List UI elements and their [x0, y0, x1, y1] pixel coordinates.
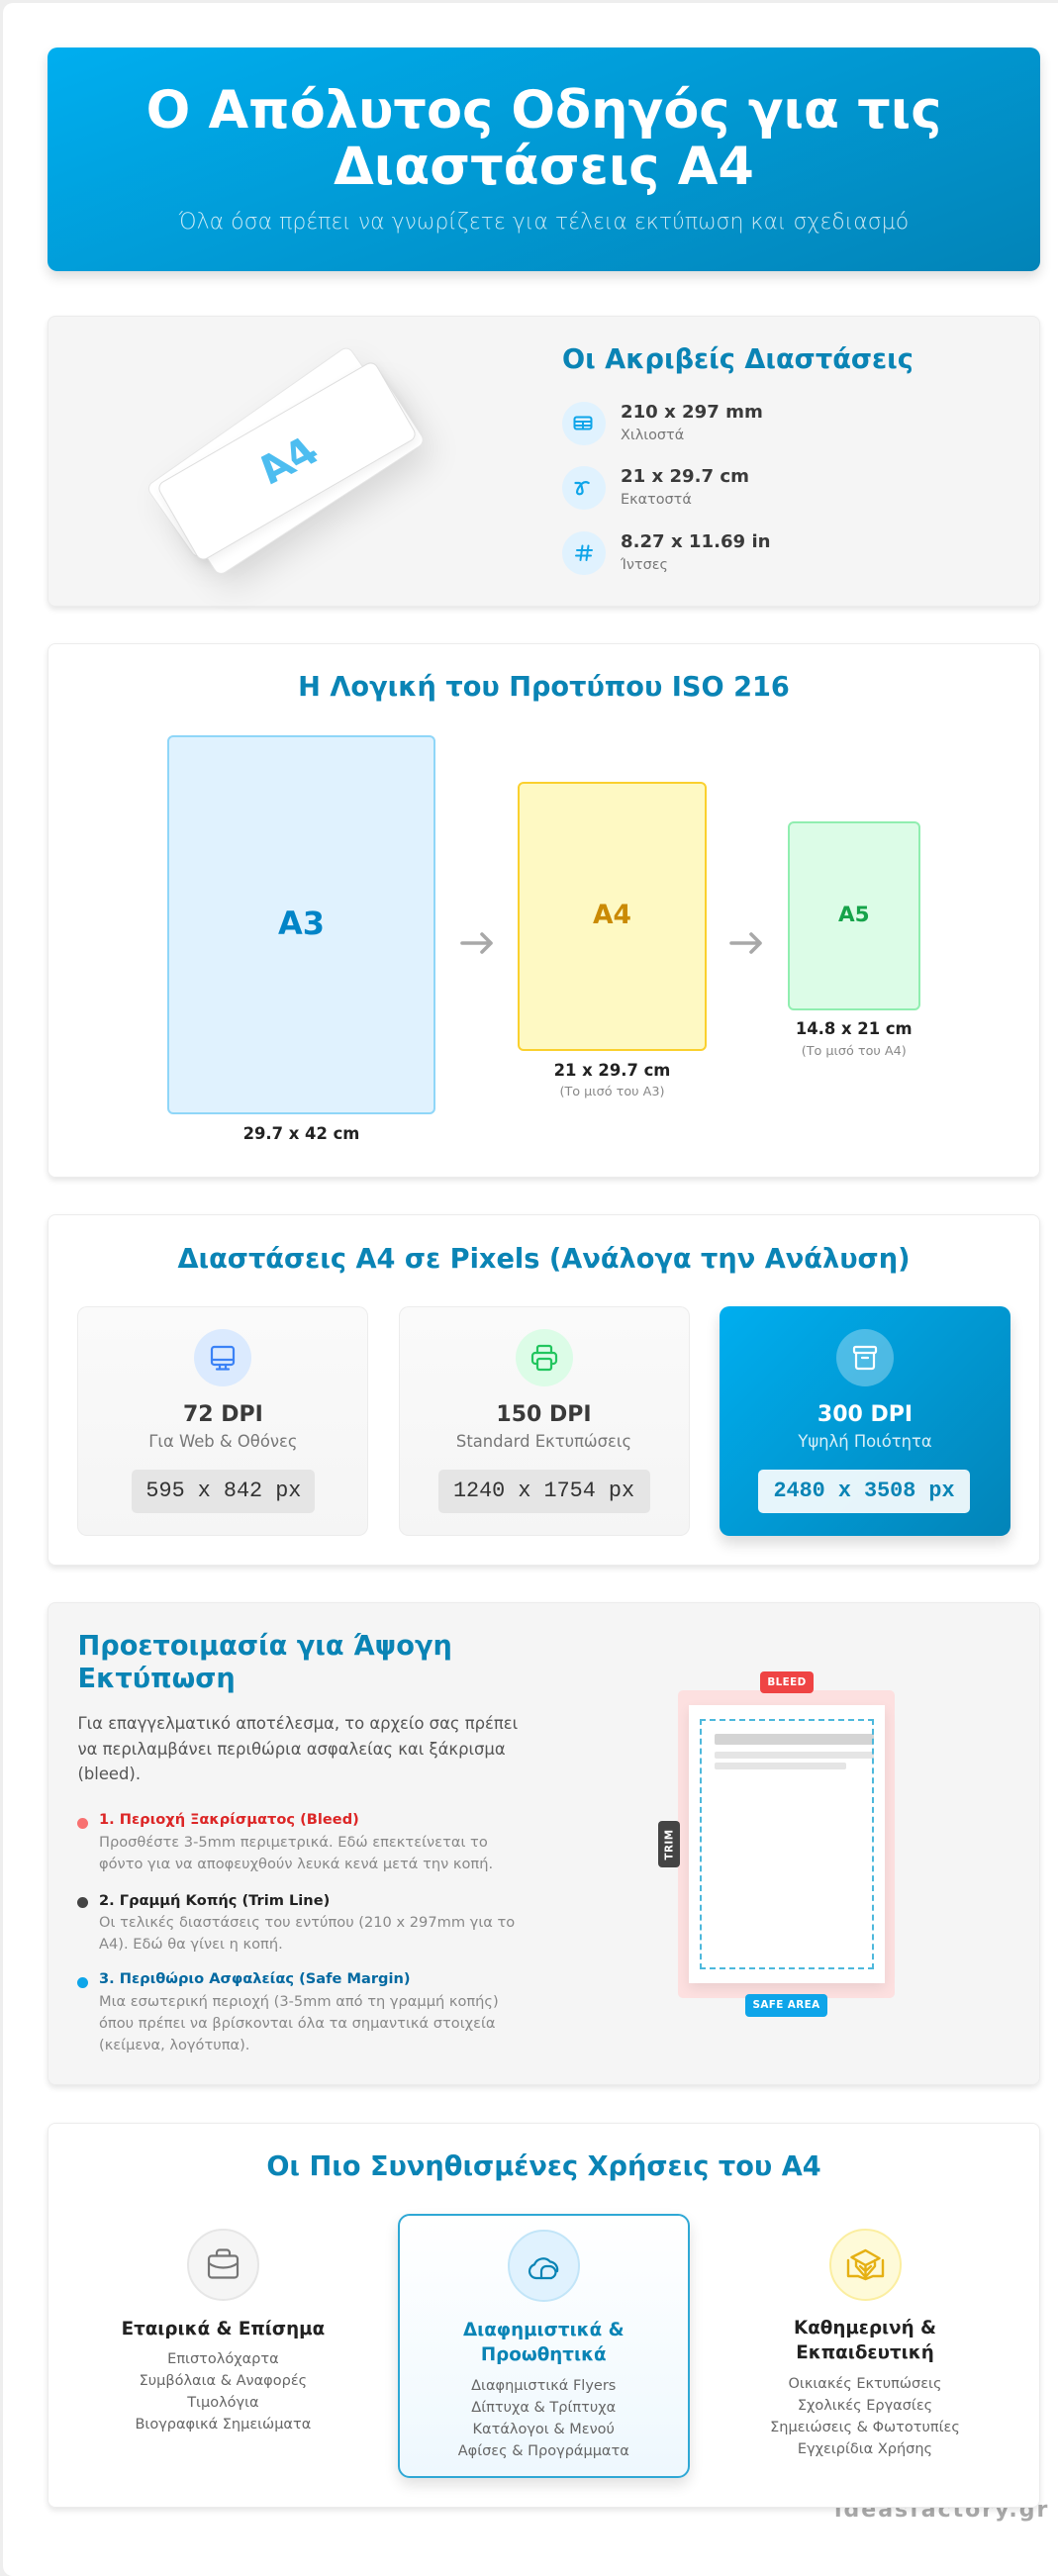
label: A5 size: 14.8 x 21 cm	[796, 1019, 913, 1038]
item title: 2. Γραμμή Κοπής (Trim Line)	[99, 1892, 330, 1909]
usage: Για Web & Οθόνες	[148, 1432, 297, 1451]
resolution: 72 DPI	[183, 1402, 263, 1427]
item: safe margin	[77, 1970, 499, 2053]
value: 210 x 297 mm	[621, 402, 763, 423]
card: 72 DPI	[77, 1306, 368, 1536]
heading: Προετοιμασία για Άψογη	[77, 1631, 452, 1662]
column: everyday and education	[770, 2229, 960, 2457]
intro paragraph	[77, 1714, 518, 1783]
tag: safe area	[745, 1994, 827, 2017]
sheet: A5	[788, 821, 920, 1010]
subtitle: Όλα όσα πρέπει να γνωρίζετε για τέλεια εκτύπωση και σχεδιασμό	[179, 210, 909, 234]
resolution: 150 DPI	[496, 1402, 592, 1427]
watermark: ideasfactory.gr	[834, 2498, 1049, 2523]
item: bleed	[77, 1811, 493, 1872]
title	[146, 80, 941, 197]
pixel size: 595 x 842 px	[145, 1479, 301, 1503]
tag: bleed	[760, 1671, 814, 1693]
item text: Οι τελικές διαστάσεις του εντύπου (210 x 297mm για το	[99, 1914, 515, 1931]
arrow: A3 to A4	[460, 932, 493, 954]
item title: 1. Περιοχή Ξακρίσματος (Bleed)	[99, 1811, 359, 1828]
panel: ISO 216 logic	[48, 643, 1040, 1178]
heading	[77, 1631, 452, 1694]
heading: Εκτύπωση	[77, 1664, 236, 1694]
column list: Οικιακές Εκτυπώσεις	[788, 2376, 941, 2392]
title: Διαστάσεις A4	[334, 137, 754, 197]
item text: A4). Εδώ θα γίνει η κοπή.	[99, 1936, 283, 1953]
placeholder bars	[715, 1734, 874, 1745]
item title: 3. Περιθώριο Ασφαλείας (Safe Margin)	[99, 1970, 411, 1987]
icon: graduation cap and book	[829, 2229, 901, 2301]
column title: Διαφημιστικά &	[463, 2320, 625, 2339]
usage: Υψηλή Ποιότητα	[798, 1432, 932, 1451]
intro paragraph: Για επαγγελματικό αποτέλεσμα, το αρχείο σας πρέπει	[77, 1714, 518, 1733]
tag: safe area: SAFE AREA	[752, 1999, 820, 2011]
column list: Βιογραφικά Σημειώματα	[135, 2417, 311, 2433]
note: half of A4: (Το μισό του A4)	[802, 1044, 907, 1059]
item text: Προσθέστε 3-5mm περιμετρικά. Εδώ επεκτείνεται το	[99, 1834, 488, 1851]
column list	[770, 2376, 960, 2457]
caption: Χιλιοστά	[621, 428, 684, 443]
column title	[463, 2320, 625, 2365]
bleed area	[678, 1690, 895, 1998]
sheet: A3	[167, 735, 435, 1114]
item text: φόντο για να αποφευχθούν λευκά κενά μετά την κοπή.	[99, 1856, 493, 1872]
item: trim line	[77, 1892, 515, 1953]
icon: archive	[836, 1329, 894, 1386]
diagram: bleed, trim, safe area	[658, 1671, 895, 2017]
safe margin outline	[700, 1719, 874, 1969]
icon: printer	[515, 1329, 572, 1386]
column list: Σημειώσεις & Φωτοτυπίες	[770, 2420, 960, 2435]
heading: Διαστάσεις A4 σε Pixels (Ανάλογα την Ανάλυση)	[177, 1244, 911, 1275]
column list: Διαφημιστικά Flyers	[471, 2378, 616, 2394]
column list: Κατάλογοι & Μενού	[473, 2422, 615, 2437]
caption: Ίντσες	[621, 557, 668, 573]
column list: Εγχειρίδια Χρήσης	[798, 2441, 932, 2457]
tag: bleed: BLEED	[767, 1676, 807, 1688]
pixel size	[132, 1470, 315, 1513]
icon: cloud	[508, 2230, 580, 2302]
caption: Εκατοστά	[621, 492, 692, 508]
item text	[99, 1914, 515, 1953]
card: 150 DPI	[398, 1306, 689, 1536]
panel: exact dimensions	[48, 316, 1040, 607]
column: advertising (highlighted)	[398, 2214, 689, 2478]
dot	[77, 1897, 87, 1908]
icon: ruler glyph	[562, 466, 606, 510]
sheet: A4	[518, 782, 707, 1051]
resolution: 300 DPI	[818, 1402, 913, 1427]
column list: Δίπτυχα & Τρίπτυχα	[471, 2400, 616, 2416]
column list: Συμβόλαια & Αναφορές	[140, 2373, 307, 2389]
column list: Τιμολόγια	[187, 2395, 259, 2411]
icon: table	[562, 402, 606, 445]
column: corporate	[122, 2229, 325, 2433]
column list: Επιστολόχαρτα	[167, 2351, 279, 2367]
panel: print preparation	[48, 1602, 1040, 2085]
label: A3 size: 29.7 x 42 cm	[243, 1124, 359, 1143]
dot	[77, 1818, 87, 1829]
column title: Εταιρικά & Επίσημα	[122, 2318, 325, 2339]
pixel size: 1240 x 1754 px	[453, 1479, 634, 1503]
dot	[77, 1977, 87, 1988]
column title: Καθημερινή &	[794, 2318, 936, 2337]
item text: (κείμενα, λογότυπα).	[99, 2037, 249, 2053]
tag: trim	[658, 1821, 680, 1867]
usage: Standard Εκτυπώσεις	[456, 1432, 631, 1451]
sheet: A4: A4	[593, 900, 631, 930]
item text	[99, 1834, 493, 1872]
icon: monitor	[194, 1329, 251, 1386]
icon: briefcase	[187, 2229, 259, 2301]
pixel size	[437, 1470, 649, 1513]
column list	[457, 2378, 629, 2459]
illustration: stacked A4 sheets	[148, 348, 433, 588]
pixel size	[758, 1470, 970, 1513]
row: inches	[562, 531, 771, 575]
label: A4 size: 21 x 29.7 cm	[554, 1061, 670, 1080]
header banner	[48, 48, 1040, 271]
value: 8.27 x 11.69 in	[621, 531, 771, 552]
intro paragraph: να περιλαμβάνει περιθώρια ασφαλείας και ξάκρισμα	[77, 1740, 506, 1759]
item text: Μια εσωτερική περιοχή (3-5mm από τη γραμμή κοπής)	[99, 1993, 499, 2010]
note: half of A3: (Το μισό του A3)	[559, 1085, 665, 1099]
panel: pixels by resolution	[48, 1214, 1040, 1566]
tag: trim: TRIM	[663, 1829, 675, 1860]
column list	[135, 2351, 311, 2433]
pixel size: 2480 x 3508 px	[773, 1479, 955, 1503]
sheet: A3: A3	[278, 905, 325, 942]
item text: όπου πρέπει να βρίσκονται όλα τα σημαντικά στοιχεία	[99, 2015, 496, 2032]
panel: common uses	[48, 2123, 1040, 2508]
heading: exact dimensions: Οι Ακριβείς Διαστάσεις	[562, 344, 914, 375]
row: centimetres	[562, 466, 749, 510]
column title: Προωθητικά	[481, 2343, 607, 2365]
title: Ο Απόλυτος Οδηγός για τις	[146, 80, 941, 141]
intro paragraph: (bleed).	[77, 1765, 141, 1783]
heading: Οι Πιο Συνηθισμένες Χρήσεις του A4	[266, 2151, 821, 2182]
item text	[99, 1993, 499, 2053]
sheet: A5: A5	[838, 903, 870, 927]
icon: hash	[562, 531, 606, 575]
value: 21 x 29.7 cm	[621, 466, 749, 487]
row: millimetres	[562, 402, 763, 445]
column list: Αφίσες & Προγράμματα	[458, 2443, 629, 2459]
trimmed page	[689, 1705, 885, 1983]
label: A4: A4	[246, 429, 330, 492]
card: 300 DPI	[720, 1306, 1010, 1536]
heading: Η Λογική του Προτύπου ISO 216	[298, 672, 790, 703]
column title	[794, 2318, 936, 2363]
column title: Εκπαιδευτική	[796, 2341, 934, 2363]
column list: Σχολικές Εργασίες	[798, 2398, 932, 2414]
arrow: A4 to A5	[729, 932, 762, 954]
